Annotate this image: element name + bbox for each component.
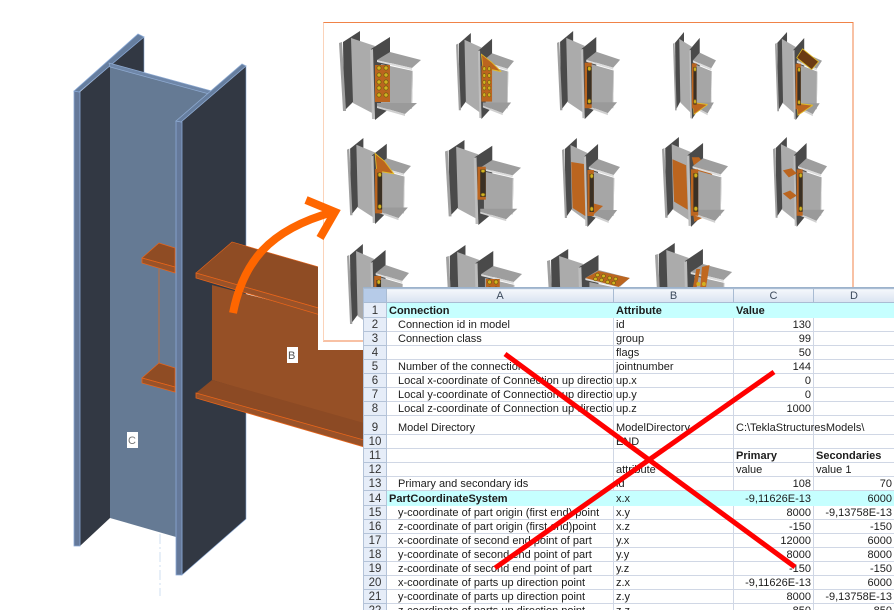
spreadsheet table: z-coordinate of part origin (first end)point xyxy=(398,521,596,533)
label B: B xyxy=(288,350,295,362)
spreadsheet table: 144 xyxy=(793,361,811,373)
spreadsheet table: Connection xyxy=(389,304,450,316)
spreadsheet table: y.z xyxy=(616,563,629,575)
spreadsheet table: -150 xyxy=(870,563,892,575)
thumbnail 8 xyxy=(562,138,620,227)
spreadsheet table: Connection class xyxy=(398,333,482,345)
spreadsheet table: 0 xyxy=(805,375,811,387)
spreadsheet table: 0 xyxy=(805,389,811,401)
spreadsheet table: -150 xyxy=(870,521,892,533)
spreadsheet table: -9,11626E-13 xyxy=(745,577,811,589)
spreadsheet table: 12 xyxy=(369,464,381,476)
spreadsheet table: 8 xyxy=(372,403,378,415)
spreadsheet table: y-coordinate of second end point of part xyxy=(398,549,592,561)
spreadsheet table: 8000 xyxy=(787,549,811,561)
spreadsheet table: id xyxy=(616,319,625,331)
spreadsheet table: z-coordinate of second end point of part xyxy=(398,563,592,575)
thumbnail 2 xyxy=(456,33,514,119)
spreadsheet table: B xyxy=(670,290,677,302)
spreadsheet table: C:\TeklaStructuresModels\ xyxy=(736,422,864,434)
spreadsheet table: D xyxy=(850,290,858,302)
spreadsheet table: y.y xyxy=(616,549,629,561)
spreadsheet table: 6000 xyxy=(868,535,892,547)
connection catalogue frame xyxy=(324,22,853,341)
spreadsheet table: value 1 xyxy=(816,464,851,476)
spreadsheet table: -9,13758E-13 xyxy=(825,507,892,519)
spreadsheet table: Local x-coordinate of Connection up direction xyxy=(398,375,614,387)
spreadsheet table: -9,13758E-13 xyxy=(825,591,892,603)
label C: C xyxy=(128,435,136,447)
spreadsheet table: Local z-coordinate of Connection up direction xyxy=(398,403,614,415)
spreadsheet table: 6000 xyxy=(868,577,892,589)
spreadsheet table: flags xyxy=(616,347,639,359)
thumbnail 1 xyxy=(339,31,421,120)
spreadsheet table: Primary and secondary ids xyxy=(398,478,528,490)
spreadsheet table: 14 xyxy=(369,492,381,504)
label C xyxy=(127,432,138,448)
spreadsheet table: END xyxy=(616,436,639,448)
spreadsheet table: x.z xyxy=(616,521,630,533)
spreadsheet table: -150 xyxy=(789,563,811,575)
spreadsheet table: 16 xyxy=(369,521,381,533)
spreadsheet table: 1000 xyxy=(787,403,811,415)
spreadsheet table: 8000 xyxy=(787,507,811,519)
spreadsheet table: 19 xyxy=(369,563,381,575)
spreadsheet table: y-coordinate of part origin (first end) point xyxy=(398,507,599,519)
spreadsheet table: Value xyxy=(736,304,765,316)
spreadsheet table: 70 xyxy=(880,478,892,490)
thumbnail 11 xyxy=(347,244,409,333)
thumbnail 9 xyxy=(662,137,728,227)
spreadsheet table: x-coordinate of parts up direction point xyxy=(398,577,585,589)
spreadsheet table: up.y xyxy=(616,389,637,401)
spreadsheet table: 99 xyxy=(799,333,811,345)
spreadsheet table: 18 xyxy=(369,549,381,561)
spreadsheet table: 7 xyxy=(372,389,378,401)
thumbnail 12 xyxy=(446,245,522,334)
spreadsheet table: 5 xyxy=(372,361,378,373)
thumbnail 10 xyxy=(773,137,827,227)
spreadsheet table: -9,11626E-13 xyxy=(745,492,811,504)
spreadsheet table: 17 xyxy=(369,535,381,547)
spreadsheet table: 11 xyxy=(369,450,381,462)
spreadsheet table: attribute xyxy=(616,464,656,476)
spreadsheet table: 2 xyxy=(372,319,378,331)
spreadsheet table: Attribute xyxy=(616,304,662,316)
white panel behind connection catalogue xyxy=(318,15,878,350)
spreadsheet table: 8000 xyxy=(868,549,892,561)
spreadsheet table: 108 xyxy=(793,478,811,490)
spreadsheet table: 10 xyxy=(369,436,381,448)
spreadsheet table: Model Directory xyxy=(398,422,475,434)
spreadsheet table: PartCoordinateSystem xyxy=(389,492,508,504)
spreadsheet table: 50 xyxy=(799,347,811,359)
spreadsheet table: 6000 xyxy=(868,492,892,504)
label B xyxy=(287,347,298,363)
spreadsheet table: id xyxy=(616,478,625,490)
spreadsheet table: y.x xyxy=(616,535,629,547)
steel beam B xyxy=(196,242,364,447)
spreadsheet table: 6 xyxy=(372,375,378,387)
spreadsheet table: x.x xyxy=(616,492,630,504)
thumbnail 4 xyxy=(673,32,716,119)
spreadsheet table: 9 xyxy=(372,422,378,434)
arrow: beam to catalogue xyxy=(233,200,335,313)
connecting beam stub behind column xyxy=(142,243,175,392)
spreadsheet table: y-coordinate of parts up direction point xyxy=(398,591,585,603)
spreadsheet table: 130 xyxy=(793,319,811,331)
spreadsheet table: 1 xyxy=(372,304,378,316)
thumbnail 7 xyxy=(445,140,521,225)
thumbnail 14 xyxy=(655,243,732,332)
spreadsheet table: C xyxy=(770,290,777,302)
spreadsheet table: 12000 xyxy=(780,535,811,547)
spreadsheet table: Local y-coordinate of Connection up direction xyxy=(398,389,614,401)
spreadsheet table: 13 xyxy=(369,478,381,490)
thumbnail 6 xyxy=(347,138,411,224)
spreadsheet table: 4 xyxy=(372,347,378,359)
steel column C xyxy=(74,34,246,596)
spreadsheet table: x.y xyxy=(616,507,630,519)
thumbnail 5 xyxy=(775,32,822,120)
spreadsheet table: value xyxy=(736,464,762,476)
thumbnail 13 xyxy=(547,249,630,338)
spreadsheet table: 15 xyxy=(369,507,381,519)
spreadsheet table: 21 xyxy=(369,591,381,603)
spreadsheet table: jointnumber xyxy=(616,361,673,373)
spreadsheet table: Secondaries xyxy=(816,450,881,462)
spreadsheet table: 8000 xyxy=(787,591,811,603)
spreadsheet table: Connection id in model xyxy=(398,319,510,331)
spreadsheet table: z.x xyxy=(616,577,630,589)
spreadsheet table: z.y xyxy=(616,591,630,603)
spreadsheet table: x-coordinate of second end point of part xyxy=(398,535,592,547)
thumbnail 3 xyxy=(557,31,620,119)
spreadsheet table xyxy=(363,287,894,610)
spreadsheet table: up.x xyxy=(616,375,637,387)
spreadsheet table: Primary xyxy=(736,450,777,462)
spreadsheet table: -150 xyxy=(789,521,811,533)
spreadsheet table: Number of the connection xyxy=(398,361,524,373)
spreadsheet table: ModelDirectory xyxy=(616,422,690,434)
spreadsheet table: up.z xyxy=(616,403,637,415)
spreadsheet table: group xyxy=(616,333,644,345)
spreadsheet table: 3 xyxy=(372,333,378,345)
spreadsheet table: 20 xyxy=(369,577,381,589)
spreadsheet table: A xyxy=(496,290,504,302)
